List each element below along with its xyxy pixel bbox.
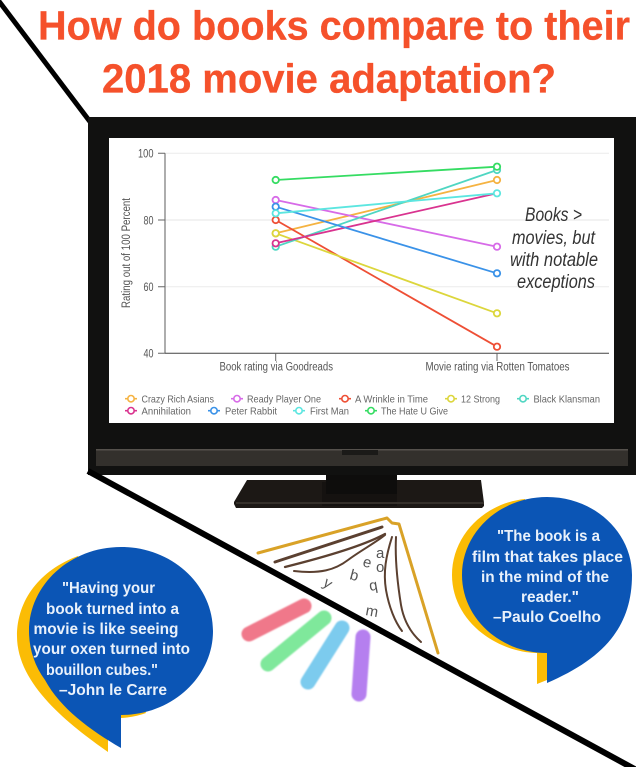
annotation: with notable <box>510 250 598 271</box>
book letters: a <box>376 545 385 562</box>
icon: open book <box>258 518 438 653</box>
series: First Man <box>272 190 500 216</box>
grid lines and axes <box>158 153 609 361</box>
diagonal line: bottom <box>88 471 636 767</box>
series: Black Klansman <box>272 167 500 250</box>
y axis tick labels: 40 <box>144 346 154 360</box>
quote text: "The book is a <box>497 528 600 545</box>
x axis labels: Book rating via Goodreads <box>220 362 333 374</box>
series: Peter Rabbit <box>272 204 500 276</box>
tv speaker strip <box>96 449 628 466</box>
book letters: y <box>320 574 336 593</box>
series: A Wrinkle in Time <box>272 217 500 350</box>
line chart <box>121 146 609 418</box>
bubble <box>462 497 632 683</box>
quote text: –Paulo Coelho <box>493 609 601 626</box>
legend: Crazy Rich Asians <box>142 394 214 406</box>
legend: A Wrinkle in Time <box>355 394 428 406</box>
quote text: film that takes place <box>472 549 623 566</box>
legend <box>125 394 600 418</box>
quote text: book turned into a <box>46 601 179 618</box>
annotation: Books > <box>525 205 582 226</box>
television <box>88 117 636 508</box>
y axis tick labels: 100 <box>138 146 154 160</box>
legend: Black Klansman <box>534 394 600 406</box>
book cover <box>258 518 438 653</box>
y axis title: Rating out of 100 Percent <box>121 197 133 308</box>
x axis labels: Movie rating via Rotten Tomatoes <box>426 362 570 374</box>
tv screen <box>109 138 614 423</box>
annotation: exceptions <box>517 272 595 293</box>
bubble shadow <box>17 556 146 752</box>
quote text: movie is like seeing <box>34 621 178 638</box>
series: Annihilation <box>272 193 497 246</box>
title: How do books compare to their <box>38 2 630 48</box>
legend: 12 Strong <box>461 394 500 406</box>
diagonal line: top left <box>0 0 91 123</box>
tv stand neck <box>326 474 397 494</box>
bubble shadow <box>452 499 547 684</box>
quote text: reader." <box>521 589 579 606</box>
y axis tick labels: 60 <box>144 280 154 294</box>
title <box>38 2 630 102</box>
book page lines <box>275 527 421 642</box>
y axis tick labels <box>138 146 154 360</box>
legend: Annihilation <box>142 406 191 418</box>
book letters: e <box>361 553 373 572</box>
tv stand base <box>234 480 484 508</box>
title: 2018 movie adaptation? <box>102 56 556 102</box>
quote text: in the mind of the <box>481 569 609 586</box>
series: 12 Strong <box>272 230 500 316</box>
callout: Paulo Coelho quote <box>452 497 632 684</box>
book letters <box>320 545 385 621</box>
quote text <box>472 528 623 626</box>
book letters: m <box>364 602 380 621</box>
bubble <box>29 547 213 748</box>
legend: Ready Player One <box>247 394 321 406</box>
x axis labels <box>220 362 570 374</box>
y axis tick labels: 80 <box>144 214 154 228</box>
quote text: your oxen turned into <box>33 641 190 658</box>
book letters: o <box>376 559 384 576</box>
legend: Peter Rabbit <box>225 406 277 418</box>
callout: John le Carre quote <box>17 547 213 752</box>
annotation <box>510 205 598 293</box>
book letters: b <box>348 566 360 585</box>
annotation: movies, but <box>512 228 596 249</box>
quote text: –John le Carre <box>59 682 167 699</box>
series: The Hate U Give <box>272 164 500 183</box>
series: Ready Player One <box>272 197 500 250</box>
legend: The Hate U Give <box>381 406 448 418</box>
series: Crazy Rich Asians <box>272 177 500 236</box>
quote text: bouillon cubes." <box>46 662 158 679</box>
quote text <box>33 580 190 699</box>
book letters: q <box>368 577 379 595</box>
quote text: "Having your <box>62 580 155 597</box>
tv body <box>88 117 636 475</box>
icon: colored bars <box>249 606 363 694</box>
legend: First Man <box>310 406 349 418</box>
